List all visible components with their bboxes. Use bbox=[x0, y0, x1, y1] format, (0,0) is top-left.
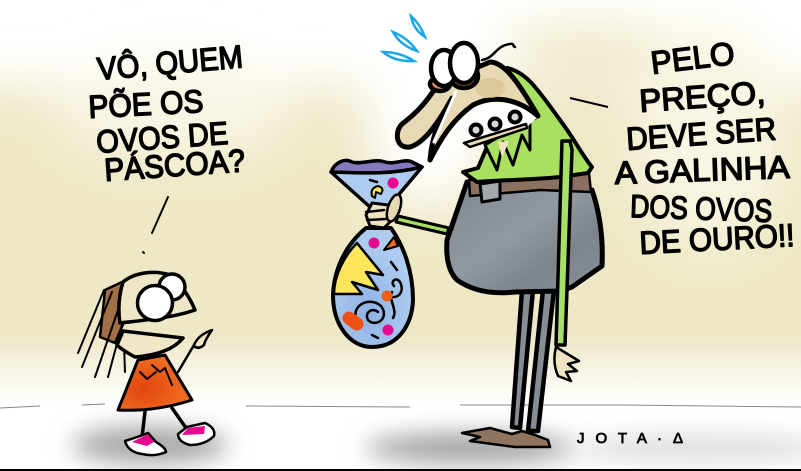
collar zigzag bbox=[485, 118, 530, 170]
lower lip bbox=[464, 124, 527, 147]
extended arm bbox=[396, 216, 449, 234]
easter egg bag bbox=[331, 160, 422, 347]
icon: sweat drops bbox=[383, 16, 425, 61]
hanging arm bbox=[556, 141, 572, 345]
girl legs bbox=[142, 408, 186, 437]
cheek shading bbox=[475, 78, 505, 98]
gripping hand bbox=[366, 203, 394, 228]
speech tail: girl bbox=[143, 197, 168, 253]
left leg bbox=[512, 290, 533, 428]
speech text: grandfather: PELO bbox=[649, 35, 736, 81]
girl eyes bbox=[138, 274, 185, 320]
belt buckle bbox=[480, 181, 500, 202]
dress mark bbox=[140, 365, 172, 385]
eyes bbox=[430, 43, 478, 91]
face and nose bbox=[397, 62, 538, 160]
speech text: girl bbox=[87, 38, 246, 188]
speech text: grandfather bbox=[614, 35, 795, 261]
head bbox=[119, 272, 195, 323]
grandfather figure bbox=[396, 43, 602, 447]
speech text: girl: OVOS DE bbox=[95, 115, 229, 160]
teeth bbox=[470, 112, 520, 136]
belt bbox=[469, 173, 591, 196]
nose slit bbox=[434, 92, 456, 142]
signature: J O T A · Δ bbox=[577, 430, 683, 447]
speech text: girl: PÕE OS bbox=[87, 83, 204, 125]
shoe colour left bbox=[132, 434, 154, 446]
finger lines bbox=[366, 210, 386, 220]
shoe colour right bbox=[182, 426, 205, 435]
shoes bbox=[462, 428, 550, 447]
speech text: grandfather: PREÇO, bbox=[638, 74, 766, 119]
thumb bbox=[384, 193, 404, 223]
speech text: girl: PÁSCOA? bbox=[103, 142, 246, 188]
dots bbox=[349, 178, 398, 336]
collar wedge bbox=[498, 141, 509, 158]
trousers bbox=[447, 182, 602, 293]
bag opening bbox=[331, 160, 422, 173]
speech text: grandfather: A GALINHA bbox=[614, 149, 791, 191]
right leg bbox=[528, 290, 554, 431]
girl figure bbox=[78, 272, 214, 455]
ground line bbox=[0, 404, 801, 408]
yellow flame bbox=[372, 186, 382, 198]
bag body bbox=[333, 228, 413, 347]
swirls bbox=[355, 180, 402, 338]
lower jaw bbox=[117, 331, 183, 357]
dress bbox=[118, 355, 192, 410]
shoe right bbox=[178, 423, 214, 445]
speech text: grandfather: DEVE SER bbox=[625, 111, 777, 157]
mouth interior bbox=[465, 103, 538, 142]
speech text: girl: VÔ, QUEM bbox=[96, 38, 244, 87]
shirt bbox=[463, 68, 592, 182]
hanging hand bbox=[554, 347, 579, 381]
hair strands bbox=[78, 290, 125, 377]
yellow zigzag bbox=[334, 243, 383, 294]
hair bbox=[100, 282, 124, 343]
bag neck bbox=[331, 167, 422, 207]
orange triangle bbox=[384, 237, 398, 250]
floor shadows bbox=[72, 426, 801, 464]
girl shoes bbox=[125, 433, 166, 455]
speech text: grandfather: DOS OVOS bbox=[630, 188, 773, 229]
girl arm and pointing hand bbox=[178, 330, 212, 372]
speech tail: grandfather bbox=[570, 98, 608, 107]
glasses arm bbox=[482, 44, 515, 60]
bottom border bbox=[0, 469, 801, 471]
